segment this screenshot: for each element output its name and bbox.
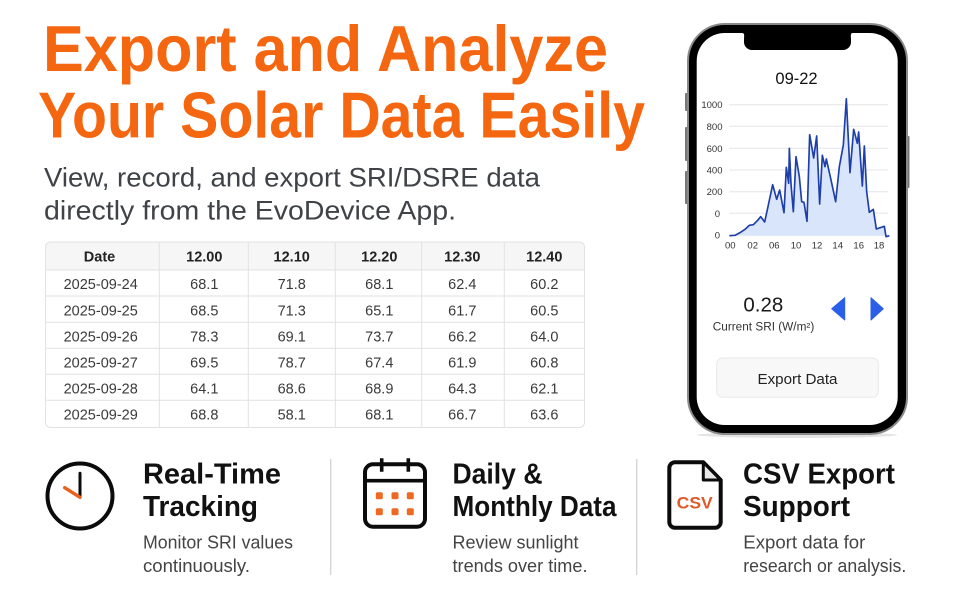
x axis labels: 14 bbox=[832, 241, 843, 252]
table body rows: 60.8 bbox=[530, 355, 558, 371]
table body rows: 71.8 bbox=[278, 277, 306, 293]
heading: Monthly Data bbox=[452, 491, 618, 523]
table body rows: 61.7 bbox=[448, 303, 476, 319]
icon: next arrow bbox=[871, 298, 883, 320]
chart date heading: 09-22 bbox=[775, 70, 818, 88]
y axis labels bbox=[701, 100, 722, 242]
feature: daily and monthly data bbox=[365, 458, 618, 576]
table body rows: 2025-09-29 bbox=[64, 407, 138, 423]
table body rows: 2025-09-25 bbox=[64, 303, 138, 319]
notch bbox=[742, 33, 853, 50]
description: Review sunlight bbox=[452, 532, 578, 552]
table body rows: 66.7 bbox=[448, 407, 476, 423]
table body rows: 68.8 bbox=[190, 407, 218, 423]
description bbox=[452, 532, 588, 576]
x axis labels bbox=[725, 241, 884, 252]
table body rows: 65.1 bbox=[365, 303, 393, 319]
phone mockup bbox=[685, 24, 910, 438]
y axis labels: 600 bbox=[707, 144, 722, 155]
y axis labels: 800 bbox=[707, 122, 722, 133]
x axis labels: 00 bbox=[725, 241, 736, 252]
heading bbox=[743, 458, 895, 523]
table header row: 12.20 bbox=[361, 250, 397, 266]
subtitle bbox=[44, 163, 541, 226]
table header row: 12.40 bbox=[526, 250, 562, 266]
x axis labels: 02 bbox=[747, 241, 758, 252]
heading bbox=[452, 458, 618, 523]
table body rows: 69.5 bbox=[190, 355, 218, 371]
subtitle: View, record, and export SRI/DSRE data bbox=[44, 163, 541, 193]
table body rows: 64.0 bbox=[530, 329, 558, 345]
table header row: 12.10 bbox=[274, 250, 310, 266]
table body rows: 2025-09-28 bbox=[64, 381, 138, 397]
phone side buttons bbox=[685, 93, 910, 204]
table body rows: 60.5 bbox=[530, 303, 558, 319]
table body rows: 60.2 bbox=[530, 277, 558, 293]
heading: Tracking bbox=[143, 491, 258, 523]
export data button bbox=[717, 358, 878, 397]
solar line chart bbox=[701, 99, 889, 252]
feature: csv export support bbox=[669, 458, 906, 576]
table body rows bbox=[64, 277, 558, 423]
phone screen bbox=[697, 33, 898, 425]
y axis labels: 200 bbox=[707, 187, 722, 198]
table body rows: 62.1 bbox=[530, 381, 558, 397]
table header row: Date bbox=[84, 250, 115, 266]
table body rows: 67.4 bbox=[365, 355, 393, 371]
data table bbox=[46, 242, 584, 428]
x axis labels: 06 bbox=[769, 241, 780, 252]
title bbox=[38, 12, 645, 152]
heading bbox=[143, 458, 281, 523]
table body rows: 69.1 bbox=[278, 329, 306, 345]
x axis labels: 10 bbox=[791, 241, 801, 252]
phone body bbox=[688, 24, 907, 434]
phone ground shadow bbox=[697, 432, 897, 438]
chart area and line bbox=[729, 99, 889, 237]
description: continuously. bbox=[143, 556, 250, 576]
x axis labels: 16 bbox=[853, 241, 864, 252]
current SRI value: Current SRI (W/m²) bbox=[713, 322, 814, 334]
description bbox=[743, 532, 906, 576]
icon: calendar bbox=[365, 458, 425, 527]
x axis labels: 18 bbox=[874, 241, 884, 252]
y axis labels: 400 bbox=[707, 166, 722, 176]
table body rows: 2025-09-26 bbox=[64, 329, 138, 345]
x axis labels: 12 bbox=[812, 241, 822, 252]
y axis labels: 1000 bbox=[701, 100, 722, 111]
table body rows: 68.5 bbox=[190, 303, 218, 319]
y axis labels: 0 bbox=[715, 209, 720, 220]
table body rows: 58.1 bbox=[278, 407, 306, 423]
description: Export data for bbox=[743, 532, 865, 552]
description bbox=[143, 532, 293, 576]
table body rows: 2025-09-24 bbox=[64, 277, 138, 293]
table body rows: 61.9 bbox=[448, 355, 476, 371]
heading: Real-Time bbox=[143, 458, 281, 490]
icon: csv file bbox=[669, 462, 721, 528]
subtitle: directly from the EvoDevice App. bbox=[44, 196, 456, 226]
table body rows: 68.6 bbox=[278, 381, 306, 397]
feature: real-time tracking bbox=[48, 458, 293, 576]
icon: previous arrow bbox=[832, 298, 845, 320]
table header row: 12.30 bbox=[444, 250, 480, 266]
current SRI value: 0.28 bbox=[743, 294, 783, 317]
table body rows: 78.7 bbox=[278, 355, 306, 371]
icon: csv file: CSV bbox=[677, 493, 713, 512]
title: Export and Analyze bbox=[43, 12, 608, 85]
icon: clock bbox=[48, 464, 112, 528]
y axis labels: 0 bbox=[715, 230, 720, 242]
heading: Support bbox=[743, 491, 850, 523]
table body rows: 66.2 bbox=[448, 329, 476, 345]
table body rows: 68.1 bbox=[190, 277, 218, 293]
table body rows: 64.1 bbox=[190, 381, 218, 397]
description: research or analysis. bbox=[743, 556, 906, 576]
table body rows: 71.3 bbox=[278, 303, 306, 319]
description: Monitor SRI values bbox=[143, 532, 293, 552]
description: trends over time. bbox=[452, 556, 588, 576]
table body rows: 62.4 bbox=[448, 277, 476, 293]
current SRI value bbox=[713, 294, 814, 334]
table body rows: 68.1 bbox=[365, 277, 393, 293]
table header row bbox=[84, 250, 562, 266]
heading: CSV Export bbox=[743, 458, 895, 490]
table header row: 12.00 bbox=[186, 250, 222, 266]
table body rows: 2025-09-27 bbox=[64, 355, 138, 371]
table body rows: 63.6 bbox=[530, 407, 558, 423]
heading: Daily & bbox=[452, 458, 542, 490]
table body rows: 78.3 bbox=[190, 329, 218, 345]
export data button: Export Data bbox=[758, 372, 838, 388]
table body rows: 73.7 bbox=[365, 329, 393, 345]
title: Your Solar Data Easily bbox=[38, 79, 645, 152]
table body rows: 64.3 bbox=[448, 381, 476, 397]
table body rows: 68.9 bbox=[365, 381, 393, 397]
table body rows: 68.1 bbox=[365, 407, 393, 423]
